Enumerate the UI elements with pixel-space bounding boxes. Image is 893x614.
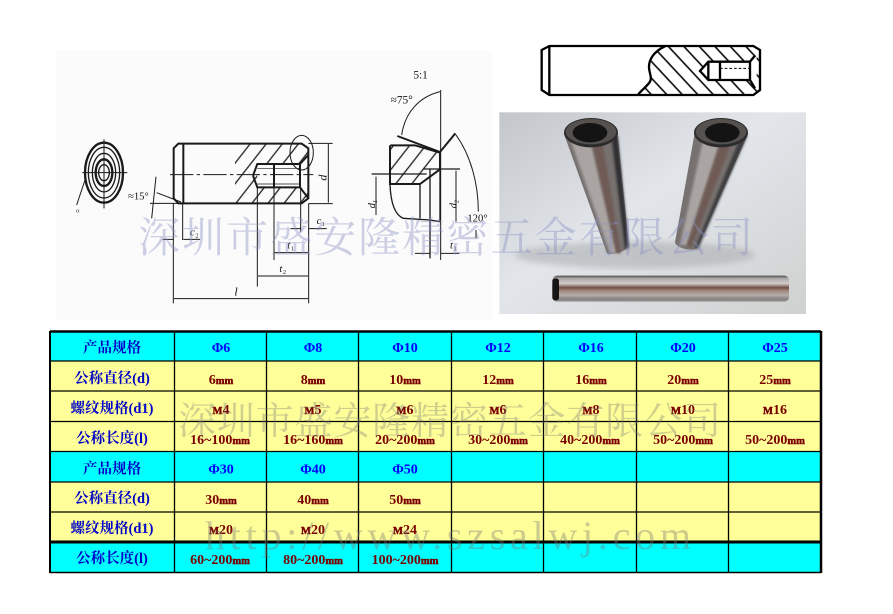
thread size values: M20 <box>209 523 233 538</box>
pin: right standing <box>675 118 748 250</box>
size headings: Φ6 <box>212 341 230 356</box>
nominal diameter values: 40mm <box>297 493 329 508</box>
nominal diameter values: 16mm <box>575 373 607 388</box>
5:1 enlarged detail: 120° <box>467 214 488 225</box>
dimension labels: c <box>317 216 322 227</box>
row labels: 产品规格 <box>83 460 141 478</box>
nominal diameter values <box>205 373 791 508</box>
thread size values: M4 <box>213 403 229 418</box>
thread size values: M10 <box>671 403 695 418</box>
nominal diameter values: 8mm <box>301 373 325 388</box>
row labels: 公称长度(l) <box>76 549 148 567</box>
thread size values <box>209 403 787 538</box>
dimension labels: c <box>190 227 195 238</box>
5:1 enlarged detail <box>367 69 488 260</box>
product photo of three pins <box>499 112 806 314</box>
yellow rows: sizes 6 to 25 <box>50 361 821 452</box>
5:1 enlarged detail: 5:1 <box>413 69 428 81</box>
detail circle <box>290 135 313 170</box>
dimension labels: t <box>287 241 291 252</box>
size headings: Φ30 <box>208 462 234 478</box>
5:1 enlarged detail: ≈75° <box>391 94 413 106</box>
nominal length values: 50~200mm <box>653 433 713 448</box>
header band: sizes 6 to 25 <box>50 332 821 361</box>
pin: left standing <box>564 118 629 254</box>
yellow rows: sizes 30 to 50 <box>50 482 821 542</box>
nominal length values: 16~160mm <box>283 433 343 448</box>
nominal length values: 100~200mm <box>372 553 439 568</box>
nominal length values: 16~100mm <box>190 433 250 448</box>
technical drawing: dimensioned pin <box>76 71 488 304</box>
dimension labels: ≈15° <box>128 191 149 202</box>
bottom cyan row <box>50 543 821 572</box>
nominal diameter values: 12mm <box>482 373 514 388</box>
nominal length values: 80~200mm <box>283 553 343 568</box>
front view of pin: α <box>76 208 80 215</box>
dimension labels <box>128 174 330 298</box>
dimension labels: l <box>234 284 238 298</box>
nominal diameter values: 50mm <box>389 493 421 508</box>
5:1 enlarged detail: 3 <box>453 246 456 252</box>
nominal diameter values: 10mm <box>389 373 421 388</box>
row labels: 螺纹规格(d1) <box>71 519 154 537</box>
row labels <box>71 338 154 567</box>
dimension labels: d <box>316 174 330 181</box>
watermark: company name over table: 深圳市盛安隆精密五金有限公司 <box>178 401 721 443</box>
dimension labels: 2 <box>195 233 198 239</box>
dimension labels: t <box>279 264 283 275</box>
thread size values: M8 <box>583 403 599 418</box>
size headings: Φ50 <box>392 462 418 478</box>
row labels: 产品规格 <box>83 338 141 356</box>
row labels: 公称直径(d) <box>74 489 150 507</box>
5:1 enlarged detail: d <box>449 203 460 208</box>
nominal diameter values: 6mm <box>209 373 233 388</box>
dimension labels: 1 <box>322 222 325 228</box>
size headings: Φ20 <box>670 341 696 356</box>
row labels: 螺纹规格(d1) <box>71 399 154 417</box>
size headings <box>208 341 788 478</box>
size headings: Φ40 <box>300 462 326 478</box>
size headings: Φ8 <box>304 341 322 356</box>
nominal length values: 50~200mm <box>745 433 805 448</box>
size headings: Φ16 <box>578 341 604 356</box>
nominal length values: 40~200mm <box>560 433 620 448</box>
watermark: company name over drawings: 深圳市盛安隆精密五金有限公司 <box>138 215 753 262</box>
watermark: website address: http://www.szsalwj.com <box>205 513 691 558</box>
nominal diameter values: 20mm <box>667 373 699 388</box>
side section view of pin <box>170 144 313 203</box>
header band: sizes 30 to 50 <box>50 452 821 482</box>
specification table <box>50 331 821 573</box>
thread size values: M6 <box>397 403 413 418</box>
nominal length values <box>190 433 805 568</box>
row labels: 公称长度(l) <box>76 429 148 447</box>
thread size values: M6 <box>490 403 506 418</box>
nominal diameter values: 30mm <box>205 493 237 508</box>
dimension labels: 2 <box>283 270 286 276</box>
thread size values: M20 <box>301 523 325 538</box>
thread size values: M24 <box>393 523 417 538</box>
nominal length values: 30~200mm <box>468 433 528 448</box>
size headings: Φ10 <box>392 341 418 356</box>
5:1 enlarged detail: t <box>450 240 454 251</box>
dimension lines <box>150 143 333 303</box>
size headings: Φ12 <box>485 341 511 356</box>
dimension labels: 1 <box>291 247 294 253</box>
cross-section diagram: top right <box>542 46 760 95</box>
nominal length values: 60~200mm <box>190 553 250 568</box>
nominal length values: 20~200mm <box>375 433 435 448</box>
5:1 enlarged detail: 1 <box>373 200 379 203</box>
thread size values: M5 <box>305 403 321 418</box>
pin: lying horizontal <box>552 276 789 302</box>
thread size values: M16 <box>763 403 787 418</box>
nominal diameter values: 25mm <box>759 373 791 388</box>
5:1 enlarged detail: d <box>367 203 378 208</box>
row labels: 公称直径(d) <box>74 369 150 387</box>
front view of pin <box>76 139 127 215</box>
5:1 enlarged detail: 2 <box>455 200 461 203</box>
size headings: Φ25 <box>762 341 788 356</box>
